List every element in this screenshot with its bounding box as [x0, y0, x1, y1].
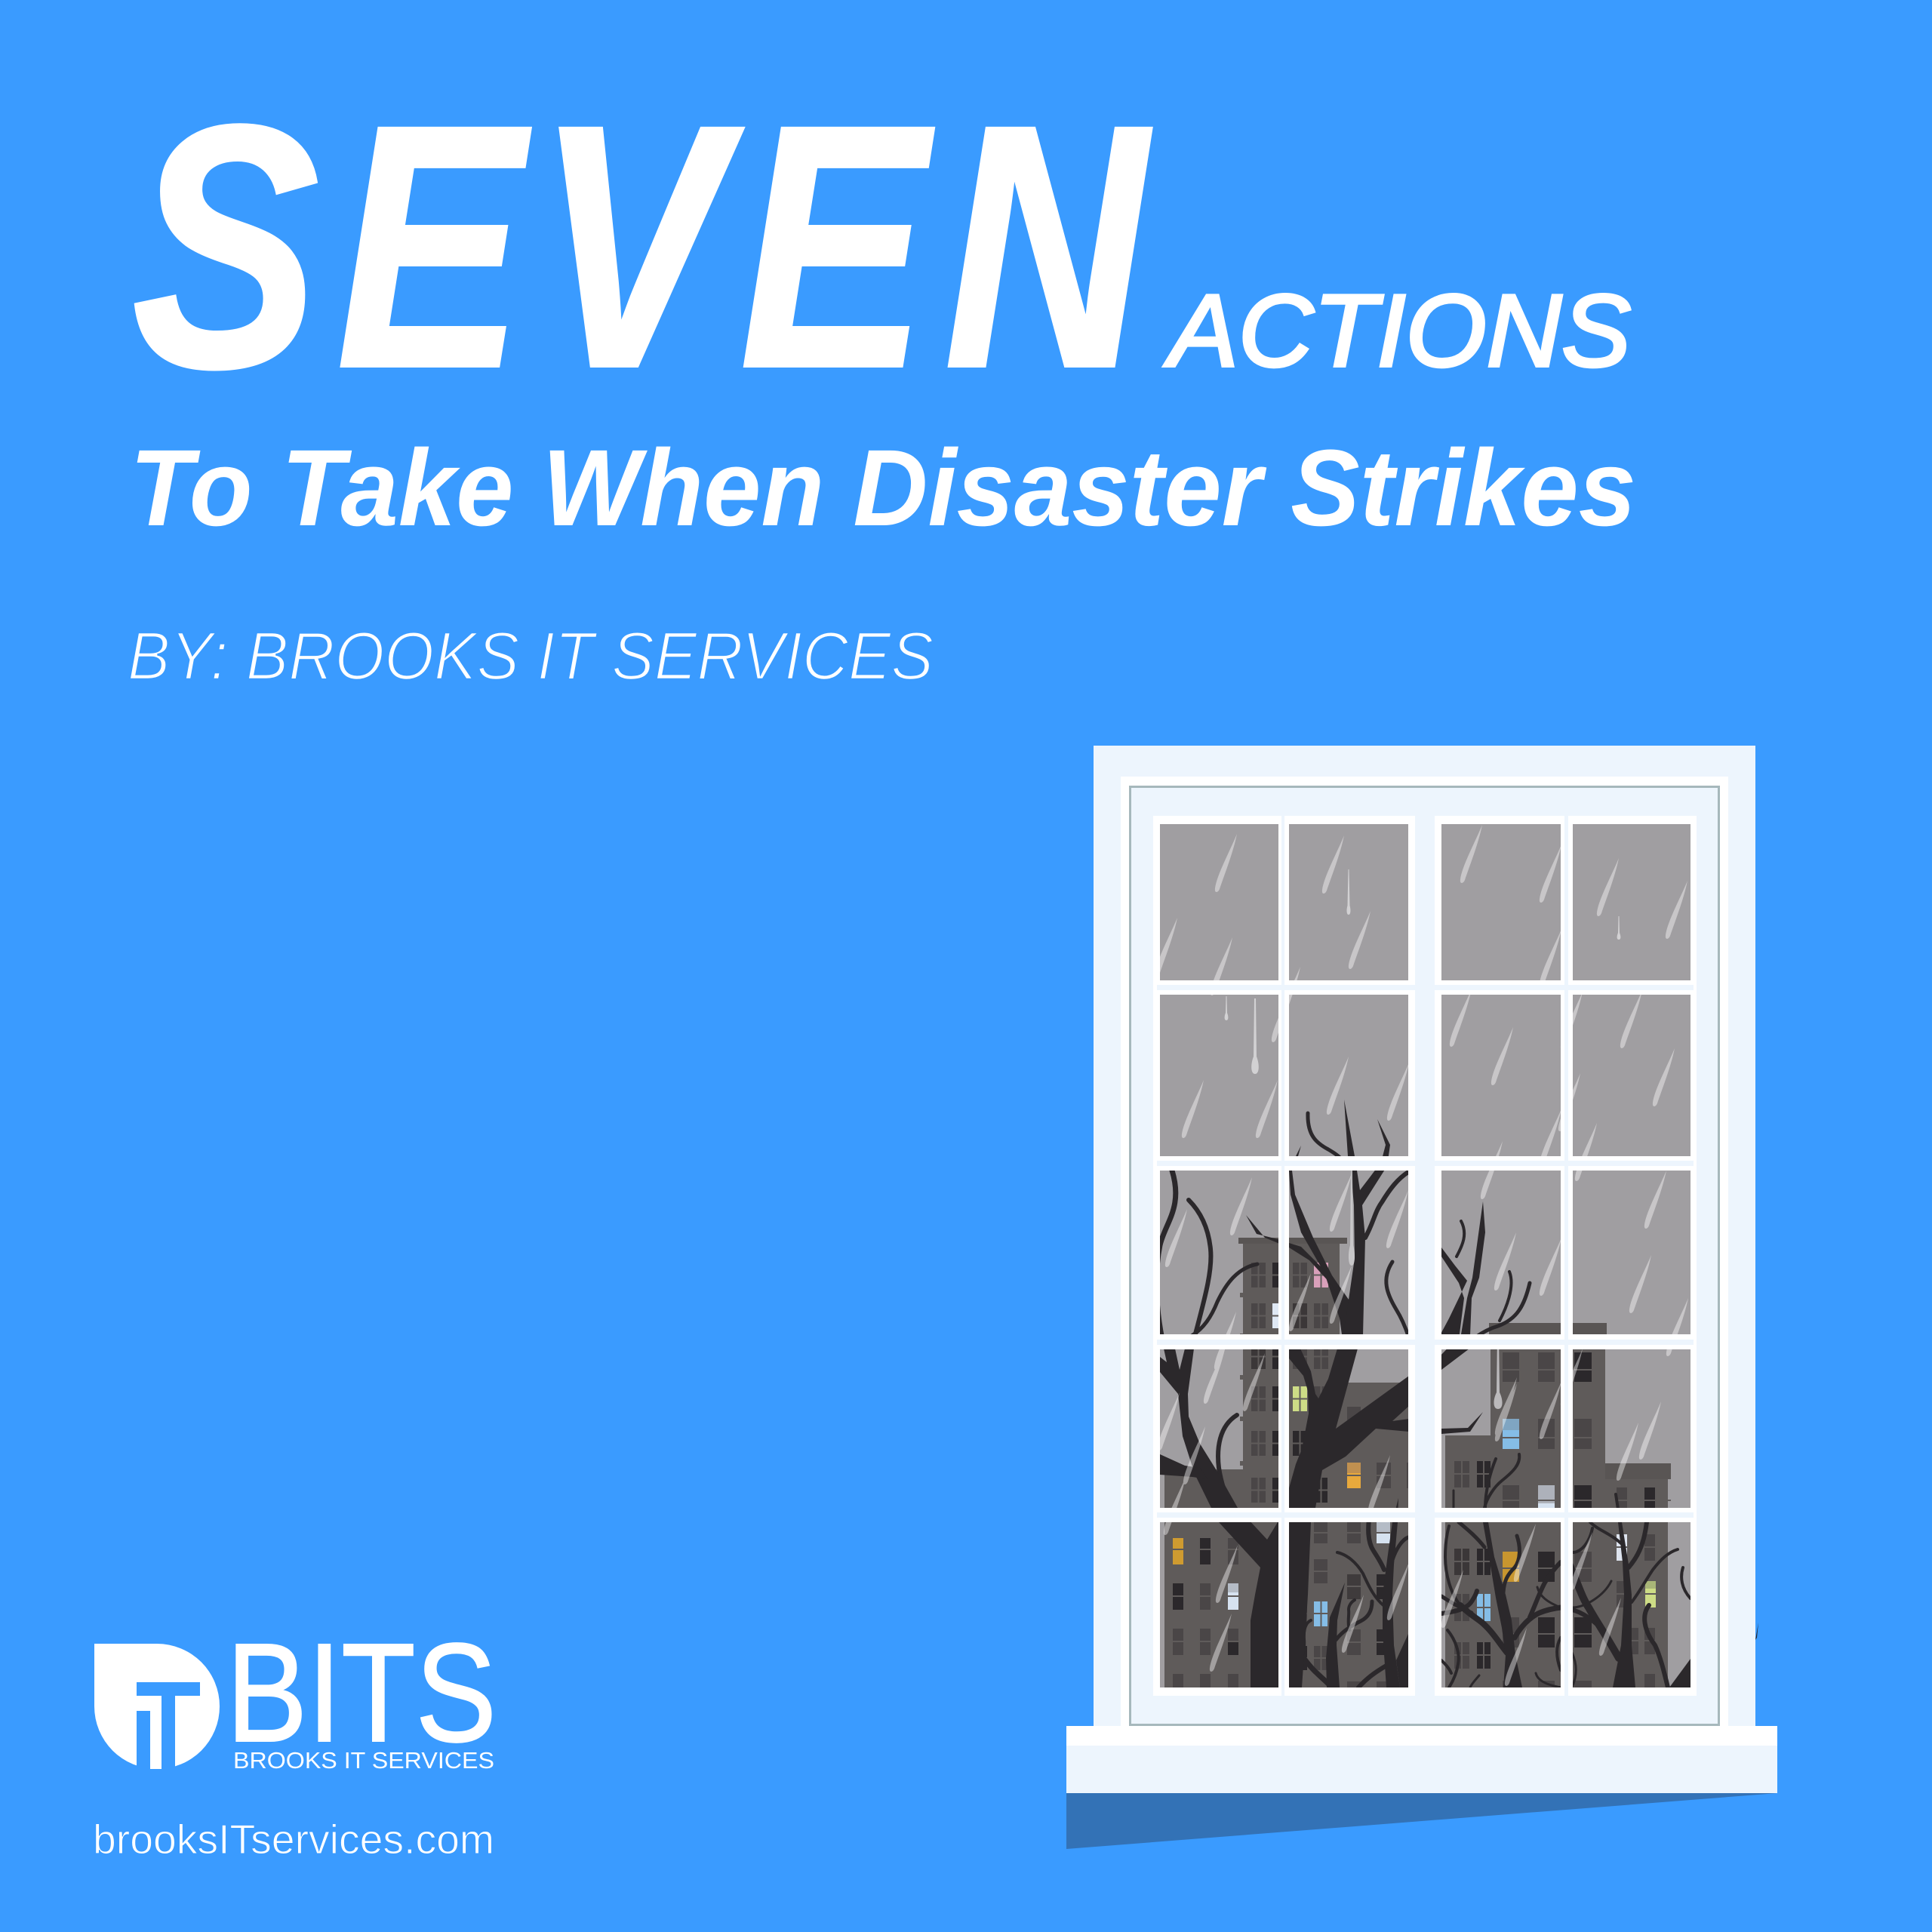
window sill [1066, 1726, 1777, 1793]
icon: IT shield [94, 1644, 220, 1774]
small tree branches [1156, 1113, 1690, 1687]
sash and muntin bars [1153, 816, 1697, 1696]
byline: BY: BROOKS IT SERVICES [128, 619, 934, 694]
buildings [1164, 1238, 1671, 1698]
lit and dark windows [1164, 1263, 1671, 1693]
subtitle: To Take When Disaster Strikes [130, 427, 1636, 549]
logo tagline: BROOKS IT SERVICES [233, 1747, 494, 1774]
window muntins [1164, 1263, 1671, 1670]
title: SEVEN: SEVEN [132, 54, 1155, 440]
logo wordmark: BITS [226, 1615, 497, 1771]
logo: BITS [94, 1615, 497, 1774]
window shadow [1066, 1793, 1777, 1849]
large tree trunk and limbs [1155, 1100, 1690, 1687]
title: ACTIONS: ACTIONS [1164, 273, 1631, 388]
illustration: window [1066, 746, 1777, 1849]
window frame [1094, 746, 1755, 1727]
branch tip outside window [1755, 1623, 1758, 1640]
rain streaks [1155, 825, 1688, 1686]
sky [1160, 824, 1690, 1687]
website: brooksITservices.com [93, 1816, 494, 1863]
view through the glass [1155, 824, 1690, 1698]
water drips [1225, 869, 1620, 1409]
